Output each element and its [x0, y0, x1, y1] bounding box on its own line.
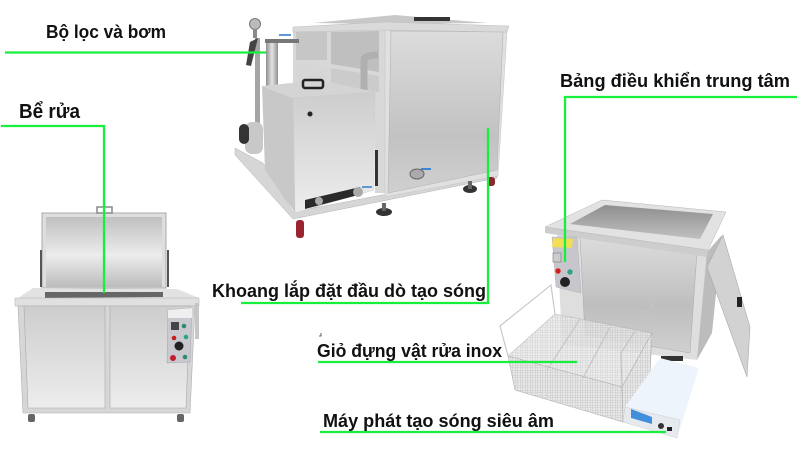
body — [18, 306, 195, 413]
side box — [195, 303, 199, 339]
machine: filter, pump and tank unit — [235, 15, 509, 238]
cabinet front — [385, 30, 507, 197]
label: Bộ lọc và bơm: Bộ lọc và bơm — [46, 22, 166, 42]
stray tick mark — [319, 333, 321, 336]
pointer line: Bể rửa — [1, 126, 104, 293]
label: Khoang lắp đặt đầu dò tạo sóng: Khoang lắp đặt đầu dò tạo sóng — [212, 280, 486, 301]
label: Bể rửa: Bể rửa — [19, 101, 81, 123]
control panel — [552, 237, 581, 293]
label: Bảng điều khiển trung tâm: Bảng điều khiển trung tâm — [560, 71, 790, 91]
dark gap beside tank — [375, 150, 378, 186]
base frame — [235, 148, 497, 219]
drain valve — [410, 169, 424, 179]
pointer line: Bộ lọc và bơm — [5, 51, 266, 54]
label: Máy phát tạo sóng siêu âm: Máy phát tạo sóng siêu âm — [323, 411, 554, 431]
ultrasonic generator box — [623, 358, 699, 438]
cabinet top lid — [313, 15, 488, 24]
side lid — [707, 235, 750, 377]
tank opening — [15, 288, 199, 300]
filter housing — [266, 40, 278, 86]
wire basket — [500, 285, 653, 422]
wheels — [28, 414, 35, 422]
machine: open-lid washing tank — [15, 207, 199, 422]
pointer line: Giỏ đựng vật rửa inox — [318, 361, 577, 363]
side tank — [262, 80, 375, 213]
drain pipes — [305, 187, 362, 209]
feet and wheels — [296, 220, 304, 238]
machine: compact tank with open side lid — [545, 200, 750, 377]
power socket under tank — [661, 356, 683, 361]
rim — [15, 298, 199, 306]
body — [557, 233, 708, 360]
cabinet back wall — [293, 30, 388, 193]
label: Giỏ đựng vật rửa inox: Giỏ đựng vật rửa inox — [317, 341, 502, 361]
control panel — [167, 308, 192, 363]
pointer line: Máy phát tạo sóng siêu âm — [320, 431, 666, 433]
pointer line: Khoang lắp đặt đầu dò tạo sóng — [241, 128, 488, 303]
pipe elbow — [364, 55, 378, 90]
pump — [245, 122, 263, 154]
lid — [42, 213, 166, 288]
pointer line: Bảng điều khiển trung tâm — [565, 97, 797, 262]
rim and opening — [545, 227, 708, 257]
